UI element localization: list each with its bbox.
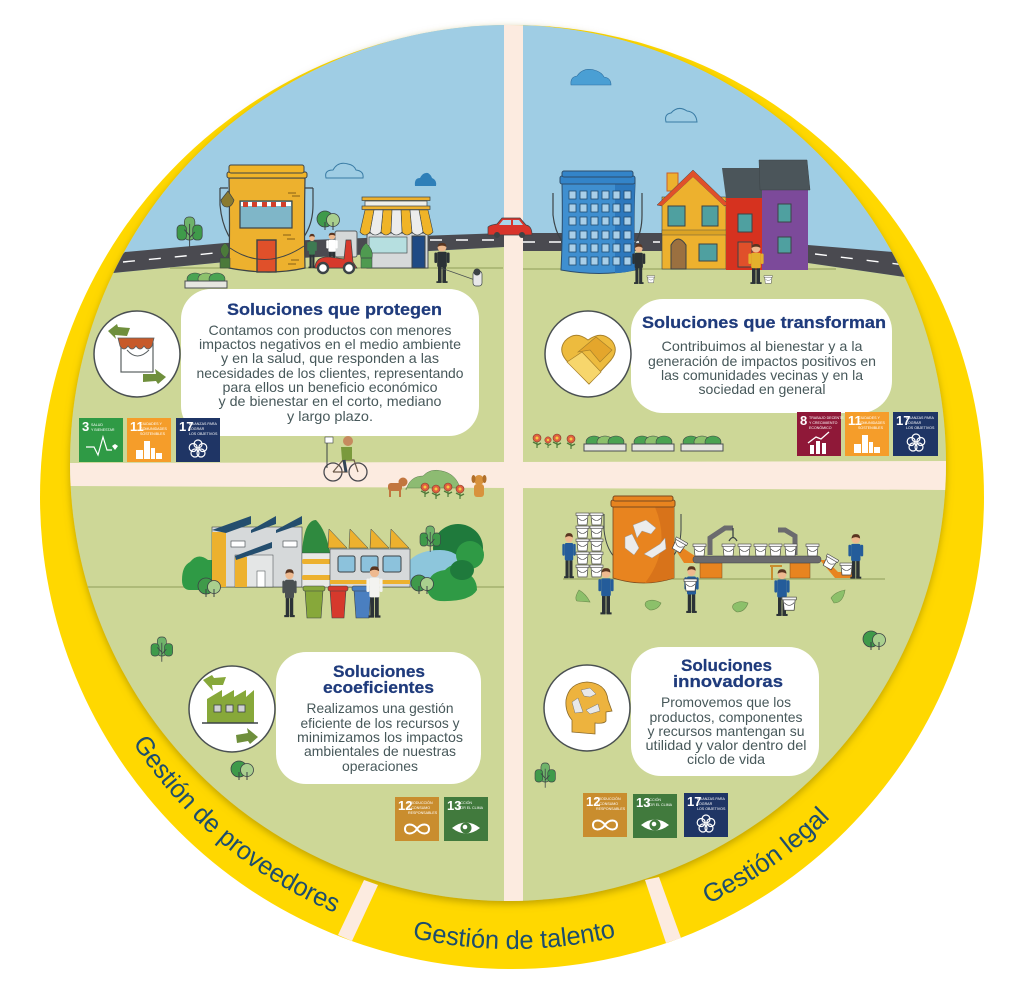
body text: Contribuimos al bienestar y a la [662,338,863,354]
label: Gestión de proveedores: Gestión de proveedores [136,737,338,912]
SDG 17: LOGRAR [697,802,713,806]
label: Gestión legal: Gestión legal [704,806,829,901]
SDG 13: 13 [447,798,461,813]
cloud outline [666,108,697,122]
green inner disc [70,25,946,901]
label: Gestión de talento: Gestión de talento [414,922,614,950]
SDG 13: POR EL CLIMA [647,803,673,807]
SDG 13: ACCIÓN [647,797,661,802]
panel: soluciones ecoeficientes [151,516,488,841]
SDG 17 [176,418,220,462]
SDG 3: 3 [82,419,89,434]
dog golden [472,475,486,497]
body text [646,694,806,767]
SDG 17 [893,412,938,456]
scooter with rider [315,231,357,273]
small trees [317,211,340,230]
bucket building blue [553,171,642,274]
body text: ciclo de vida [687,751,765,767]
body text: Promovemos que los [661,694,791,710]
body text: y recursos mantengan su [648,723,804,739]
body text: eficiente de los recursos y [300,715,460,731]
body text: Contamos con productos con menores [208,322,452,338]
icon: heart handshake [545,311,631,397]
trees [535,631,886,788]
heading: Soluciones [681,656,772,675]
man with dog [434,243,482,286]
body text: y en la salud, que responden a las [221,350,439,366]
icon: shop bucket [94,311,180,397]
SDG 8: Y CRECIMIENTO [809,421,838,425]
SDG 12: 12 [398,798,412,813]
SDG 12 [395,797,439,841]
cloud blue [571,69,611,85]
recycling bins [303,586,372,618]
SDG 12: PRODUCCIÓN [408,800,433,805]
body text: generación de impactos positivos en [648,353,876,369]
heading: Soluciones que transforman [642,313,886,332]
SDG 17: 17 [179,419,193,434]
body text [648,338,876,397]
bubble [276,652,481,784]
flowers [533,434,575,449]
SDG 17: LOS OBJETIVOS [697,807,726,811]
plant beside bucket [220,243,230,268]
SDG 13 [633,794,677,838]
heading: Soluciones que protegen [227,300,442,319]
woman [307,234,317,268]
factory scene [182,516,484,601]
trees [151,637,254,780]
bubble [181,289,479,436]
SDG 17: ALIANZAS PARA [189,422,217,426]
body text: las comunidades vecinas y en la [661,367,863,383]
planters [584,436,723,451]
SDG 11: COMUNIDADES [858,421,886,425]
shop [360,197,433,268]
SDG 8 [797,412,844,456]
SDG 11: SOSTENIBLES [858,426,884,430]
SDG 3 [79,418,123,462]
heading [323,662,434,697]
heading: ecoeficientes [323,678,434,697]
workers [562,533,863,616]
SDG 11: CIUDADES Y [858,416,881,420]
SDG 17: LOS OBJETIVOS [189,432,218,436]
heading: innovadoras [673,672,783,691]
SDG 12: RESPONSABLES [596,807,626,811]
hanging plant [221,191,234,207]
SDG 17: 17 [896,413,910,428]
SDG 12: Y CONSUMO [596,802,618,806]
SDG 3: SALUD [91,423,103,427]
SDG 12 [583,793,627,837]
window grid [569,191,631,265]
body text: Realizamos una gestión [306,700,454,716]
sky, road and cross paths [60,20,960,910]
body text: y de bienestar en el corto, mediano [218,393,442,409]
painter and paint can [748,244,772,284]
man [366,566,383,618]
panel: soluciones que protegen [79,163,532,462]
leaves [576,590,845,612]
body text: y largo plazo. [287,408,373,424]
SDG 12: RESPONSABLES [408,811,438,815]
body text: ambientales de nuestras [304,743,456,759]
panel: soluciones que transforman [533,69,938,456]
conveyor [670,528,853,578]
body text: necesidades de los clientes, representando [196,365,464,381]
SDG tiles [797,412,938,456]
planter [185,273,227,288]
SDG tiles [395,797,488,841]
SDG 11 [845,412,889,456]
SDG 12: PRODUCCIÓN [596,796,621,801]
body text: impactos negativos en el medio ambiente [199,336,461,352]
SDG 17: LOGRAR [906,421,922,425]
flowers [421,483,464,499]
ring labels [136,737,829,950]
SDG 13: POR EL CLIMA [458,806,484,810]
plant pot [360,243,372,268]
SDG 17: LOS OBJETIVOS [906,426,935,430]
bubble [631,299,892,413]
SDG 12: 12 [586,794,600,809]
cloud dark [415,173,436,186]
SDG 12: Y CONSUMO [408,806,430,810]
SDG 8: TRABAJO DECENTE [809,416,844,420]
bubble [631,647,819,776]
SDG 3: Y BIENESTAR [91,428,115,432]
cyclist and roadside scene [324,436,486,499]
body text: sociedad en general [698,381,826,397]
SDG 11 [127,418,171,462]
cyclist [324,436,367,481]
ring separators [338,877,681,943]
SDG 8: ECONÓMICO [809,425,832,430]
body text: operaciones [342,758,418,774]
bush [406,470,460,490]
SDG 13 [444,797,488,841]
SDG 8: 8 [800,413,807,428]
houses [657,160,810,270]
SDG 11: COMUNIDADES [140,427,168,431]
SDG 17 [684,793,728,837]
SDG 17: 17 [687,794,701,809]
body text: para ellos un beneficio económico [222,379,438,395]
SDG 17: ALIANZAS PARA [697,797,725,801]
heading: Soluciones [333,662,425,681]
woman [282,569,297,617]
orange recycling bucket [604,496,681,583]
heading [673,656,783,691]
body text: utilidad y valor dentro del [646,737,806,753]
body text: minimizamos los impactos [297,729,463,745]
SDG 17: LOGRAR [189,427,205,431]
SDG 17: ALIANZAS PARA [906,416,934,420]
SDG 11: 11 [848,413,862,428]
SDG 11: CIUDADES Y [140,422,163,426]
tree left [177,217,202,247]
SDG 13: ACCIÓN [458,800,472,805]
SDG 13: 13 [636,795,650,810]
dog brown [388,478,408,497]
SDG 11: 11 [130,419,144,434]
kid and paint can [632,244,655,284]
SDG tiles [583,793,728,838]
car [488,218,532,238]
panel: soluciones innovadoras [535,496,886,838]
cloud outline [326,163,363,178]
SDG 11: SOSTENIBLES [140,432,166,436]
body text [196,322,464,424]
body text [297,700,463,774]
bucket building yellow [220,165,313,272]
body text: productos, componentes [650,709,802,725]
icon: head with recycling [544,665,630,751]
SDG tiles [79,418,220,462]
white bucket stacks [576,513,603,577]
icon: factory [189,666,275,752]
